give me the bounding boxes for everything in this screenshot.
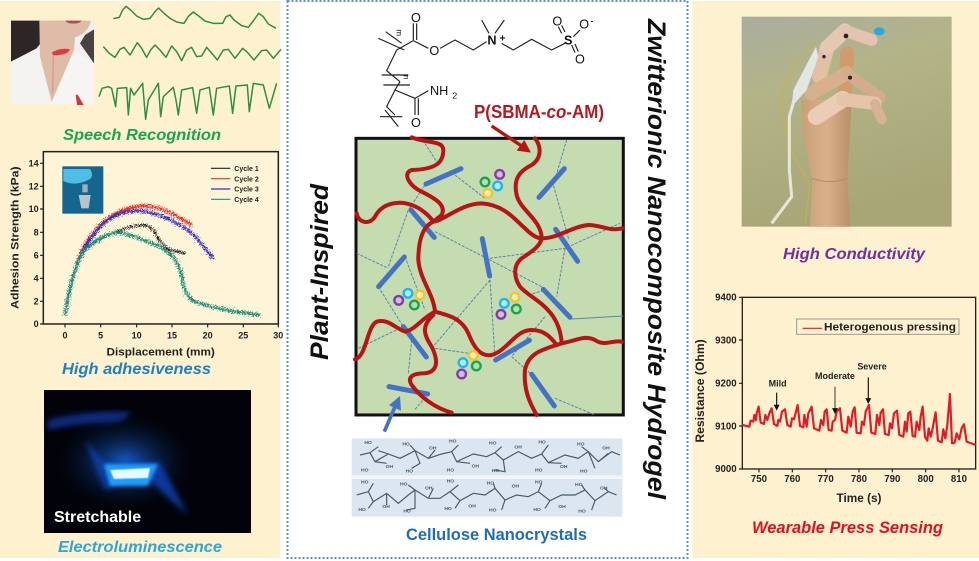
label: P(SBMA-co-AM): P(SBMA-co-AM) — [474, 102, 604, 122]
chart: adhesion strength vs displacement: 6 — [34, 250, 39, 260]
thin crosslinks — [357, 140, 620, 415]
chemical structure: SBMA-co-AM monomers: O — [411, 11, 421, 25]
label: Stretchable: Stretchable — [54, 509, 141, 526]
chart: adhesion strength vs displacement: 12 — [29, 181, 39, 191]
cellulose nanocrystal rods — [379, 169, 578, 406]
chart: adhesion strength vs displacement: Cycle 1 — [234, 166, 259, 173]
chart: resistance vs time — [694, 293, 976, 505]
chemical structure: cellulose chains — [352, 438, 622, 517]
chemical structure: SBMA-co-AM monomers: O — [575, 52, 585, 66]
chemical structure: cellulose chains: OH — [382, 504, 390, 510]
chart: resistance vs time: 810 — [951, 474, 967, 485]
chemical structure: cellulose chains: OH — [386, 464, 394, 470]
chart: resistance vs time: 760 — [784, 474, 800, 485]
chemical structure: cellulose chains: HO — [487, 481, 494, 487]
chart: adhesion strength vs displacement: Cycle 4 — [234, 197, 259, 204]
chart: resistance vs time: 790 — [884, 474, 900, 485]
label: Cellulose Nanocrystals: Cellulose Nanocrystals — [406, 525, 587, 544]
chemical structure: SBMA-co-AM monomers: m — [395, 29, 404, 36]
chart: adhesion strength vs displacement: 15 — [167, 330, 177, 340]
chart: adhesion strength vs displacement: 10 — [29, 204, 39, 214]
photo: stretchable electroluminescence — [44, 390, 251, 533]
chart: adhesion strength vs displacement: 30 — [273, 330, 283, 340]
heading: Speech Recognition: Speech Recognition — [63, 127, 221, 144]
chemical structure: cellulose chains: OH — [602, 445, 610, 451]
panel: right properties — [692, 1, 979, 558]
chemical structure: SBMA-co-AM monomers: O — [411, 116, 421, 130]
chemical structure: cellulose chains: OH — [514, 444, 522, 450]
heading: Wearable Press Sensing: Wearable Press Sensing — [752, 519, 943, 537]
chemical structure: cellulose chains: OH — [468, 503, 476, 509]
heading: Plant-Inspired: Plant-Inspired — [306, 183, 334, 360]
chart: adhesion strength vs displacement: 25 — [238, 330, 248, 340]
chart: adhesion strength vs displacement: 10 — [132, 330, 142, 340]
photo: wooden hand with sensor — [742, 17, 952, 227]
chemical structure: SBMA-co-AM monomers: n — [401, 75, 410, 79]
chemical structure: SBMA-co-AM monomers: N — [487, 34, 496, 48]
chart: adhesion strength vs displacement: 8 — [34, 227, 39, 237]
chart: resistance vs time: 750 — [751, 474, 767, 485]
chart: resistance vs time: Severe — [857, 362, 887, 372]
chemical structure: cellulose chains: HO — [406, 469, 413, 475]
chemical structure: cellulose chains: HO — [447, 467, 454, 473]
chart: adhesion strength vs displacement: Displacement (mm) — [106, 346, 215, 358]
chemical structure: cellulose chains: HO — [449, 439, 457, 445]
chemical structure: cellulose chains: HO — [444, 506, 452, 512]
chart: adhesion strength vs displacement: Cycle 3 — [234, 187, 259, 194]
chemical structure: cellulose chains: HO — [489, 441, 497, 447]
chemical structure: SBMA-co-AM monomers: NH — [430, 84, 448, 98]
ion clusters — [394, 170, 521, 378]
chemical structure: cellulose chains: HO — [533, 507, 541, 513]
chemical structure: cellulose chains: HO — [403, 509, 411, 515]
chemical structure: cellulose chains: HO — [489, 508, 497, 514]
chemical structure: cellulose chains: OH — [558, 504, 566, 510]
arrow: to polymer chain — [492, 126, 531, 153]
chart: resistance vs time: 9100 — [715, 421, 737, 432]
chart: speech signal traces — [99, 6, 281, 119]
chart: adhesion strength vs displacement: 5 — [98, 330, 103, 340]
chart: adhesion strength vs displacement: 0 — [34, 319, 39, 329]
diagram: hydrogel network — [355, 137, 623, 415]
chemical structure: SBMA-co-AM monomers: S — [564, 34, 572, 48]
chart: adhesion strength vs displacement — [10, 152, 283, 358]
chart: resistance vs time: Resistance (Ohm) — [694, 339, 707, 443]
heading: High adhesiveness: High adhesiveness — [62, 361, 211, 378]
heading: High Conductivity: High Conductivity — [783, 246, 926, 263]
chemical structure: cellulose chains: HO — [535, 467, 543, 473]
chart: adhesion strength vs displacement: 14 — [29, 158, 39, 168]
chart: adhesion strength vs displacement: 4 — [34, 273, 39, 283]
chemical structure: cellulose chains: OH — [472, 463, 480, 469]
chart: resistance vs time: 9300 — [715, 335, 737, 346]
chemical structure: cellulose chains: HO — [580, 469, 588, 475]
panel: left properties — [0, 1, 280, 558]
chart: resistance vs time: Moderate — [815, 371, 855, 381]
chemical structure: cellulose chains: HO — [535, 480, 543, 486]
chemical structure: SBMA-co-AM monomers: O — [579, 18, 589, 32]
chemical structure: SBMA-co-AM monomers: + — [500, 33, 506, 44]
chart: resistance vs time: 780 — [851, 474, 867, 485]
chart: resistance vs time: 9200 — [715, 379, 737, 390]
chemical structure: cellulose chains: HO — [447, 478, 454, 484]
chart: adhesion strength vs displacement: Cycle 2 — [234, 176, 259, 183]
chemical structure: cellulose chains: OH — [512, 483, 520, 489]
chemical structure: cellulose chains: HO — [538, 439, 546, 445]
chart: resistance vs time: 800 — [918, 474, 934, 485]
chemical structure: cellulose chains: OH — [560, 464, 568, 470]
chemical structure: cellulose chains: OH — [429, 445, 437, 451]
chart: resistance vs time: 770 — [818, 474, 834, 485]
chart: resistance vs time: 9000 — [715, 464, 737, 475]
chemical structure: cellulose chains: HO — [492, 468, 499, 474]
arrow: to cellulose rod — [384, 396, 401, 432]
chemical structure: cellulose chains: OH — [425, 485, 433, 491]
chart: adhesion strength vs displacement: 2 — [34, 296, 39, 306]
chart: resistance vs time: Heterogenous pressing — [824, 321, 956, 333]
chemical structure: cellulose chains: HO — [361, 467, 369, 473]
chemical structure: SBMA-co-AM monomers: 2 — [452, 90, 457, 100]
chemical structure: cellulose chains: HO — [400, 481, 408, 487]
polymer chains — [355, 137, 622, 415]
heading: Zwitterionic Nanocomposite Hydrogel: Zwitterionic Nanocomposite Hydrogel — [642, 18, 670, 500]
chemical structure: cellulose chains: HO — [358, 507, 366, 513]
chart: resistance vs time: Time (s) — [836, 492, 882, 505]
chemical structure: cellulose chains: HO — [361, 479, 369, 485]
chart: adhesion strength vs displacement: 20 — [203, 330, 213, 340]
panel: central hydrogel dashed frame — [288, 1, 688, 558]
chemical structure: cellulose chains: HO — [402, 442, 410, 448]
chart: resistance vs time: Mild — [769, 378, 787, 388]
chemical structure: cellulose chains: HO — [577, 442, 585, 448]
photo: speech sensor on neck — [11, 21, 94, 104]
chemical structure: SBMA-co-AM monomers: - — [591, 16, 594, 25]
chemical structure: SBMA-co-AM monomers: O — [429, 44, 439, 58]
chemical structure: SBMA-co-AM monomers: O — [552, 14, 562, 28]
chart: adhesion strength vs displacement: 0 — [62, 330, 67, 340]
heading: Electroluminescence: Electroluminescence — [58, 539, 222, 556]
chemical structure: cellulose chains: HO — [364, 440, 372, 446]
chart: resistance vs time: 9400 — [715, 293, 737, 304]
chart: adhesion strength vs displacement: Adhesion Strength (kPa) — [10, 166, 22, 309]
chemical structure: SBMA-co-AM monomers — [378, 11, 594, 130]
chemical structure: cellulose chains: HO — [575, 482, 583, 488]
chemical structure: cellulose chains: HO — [578, 509, 586, 515]
chemical structure: cellulose chains: OH — [600, 485, 608, 491]
